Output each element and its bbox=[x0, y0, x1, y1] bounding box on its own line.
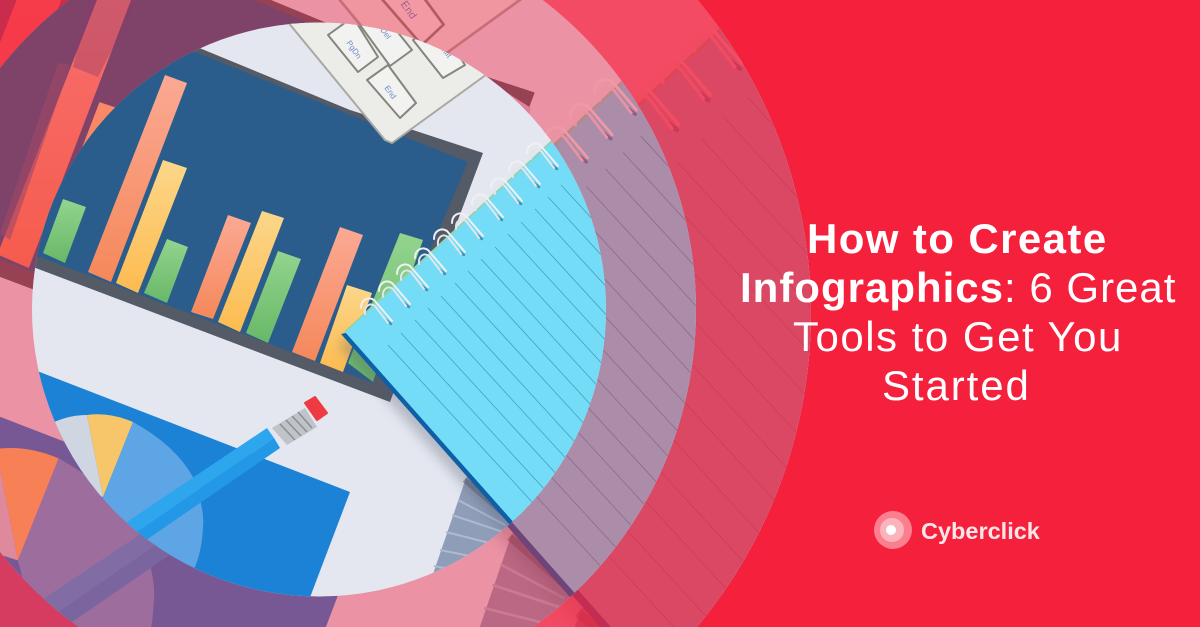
bar chart bbox=[43, 75, 423, 382]
pencil bbox=[100, 397, 327, 558]
chart frame bbox=[0, 0, 483, 402]
logo wordmark: Cyberclick bbox=[921, 518, 1041, 544]
keyboard: PgDn bbox=[344, 39, 363, 60]
pie chart bbox=[20, 414, 203, 600]
outer ring: enlarged photo under strong red tint bbox=[0, 0, 811, 627]
chart blue panel bbox=[0, 0, 468, 383]
title: Infographics: 6 Great bbox=[740, 264, 1176, 311]
lower blue panel bbox=[0, 372, 350, 627]
keyboard: Del bbox=[378, 26, 393, 41]
inner circle: desk photo with charts, keyboard, notebook and pencil bbox=[32, 22, 606, 596]
keyboard bbox=[288, 0, 522, 144]
spiral notebook bbox=[341, 28, 811, 627]
middle ring: enlarged photo under light red tint bbox=[0, 0, 696, 627]
striped table edge bbox=[434, 476, 600, 627]
keyboard: End bbox=[382, 84, 398, 101]
notebook ruled lines bbox=[388, 96, 811, 627]
logo: Cyberclick bbox=[874, 511, 1041, 549]
keyboard: Shift bbox=[436, 42, 454, 60]
notebook spiral binding bbox=[361, 143, 558, 324]
icon: logo circle bbox=[874, 511, 912, 549]
title: Tools to Get You bbox=[793, 313, 1123, 360]
title: How to Create bbox=[807, 215, 1108, 262]
title: Started bbox=[882, 362, 1031, 409]
notebook shadow bbox=[345, 340, 513, 528]
